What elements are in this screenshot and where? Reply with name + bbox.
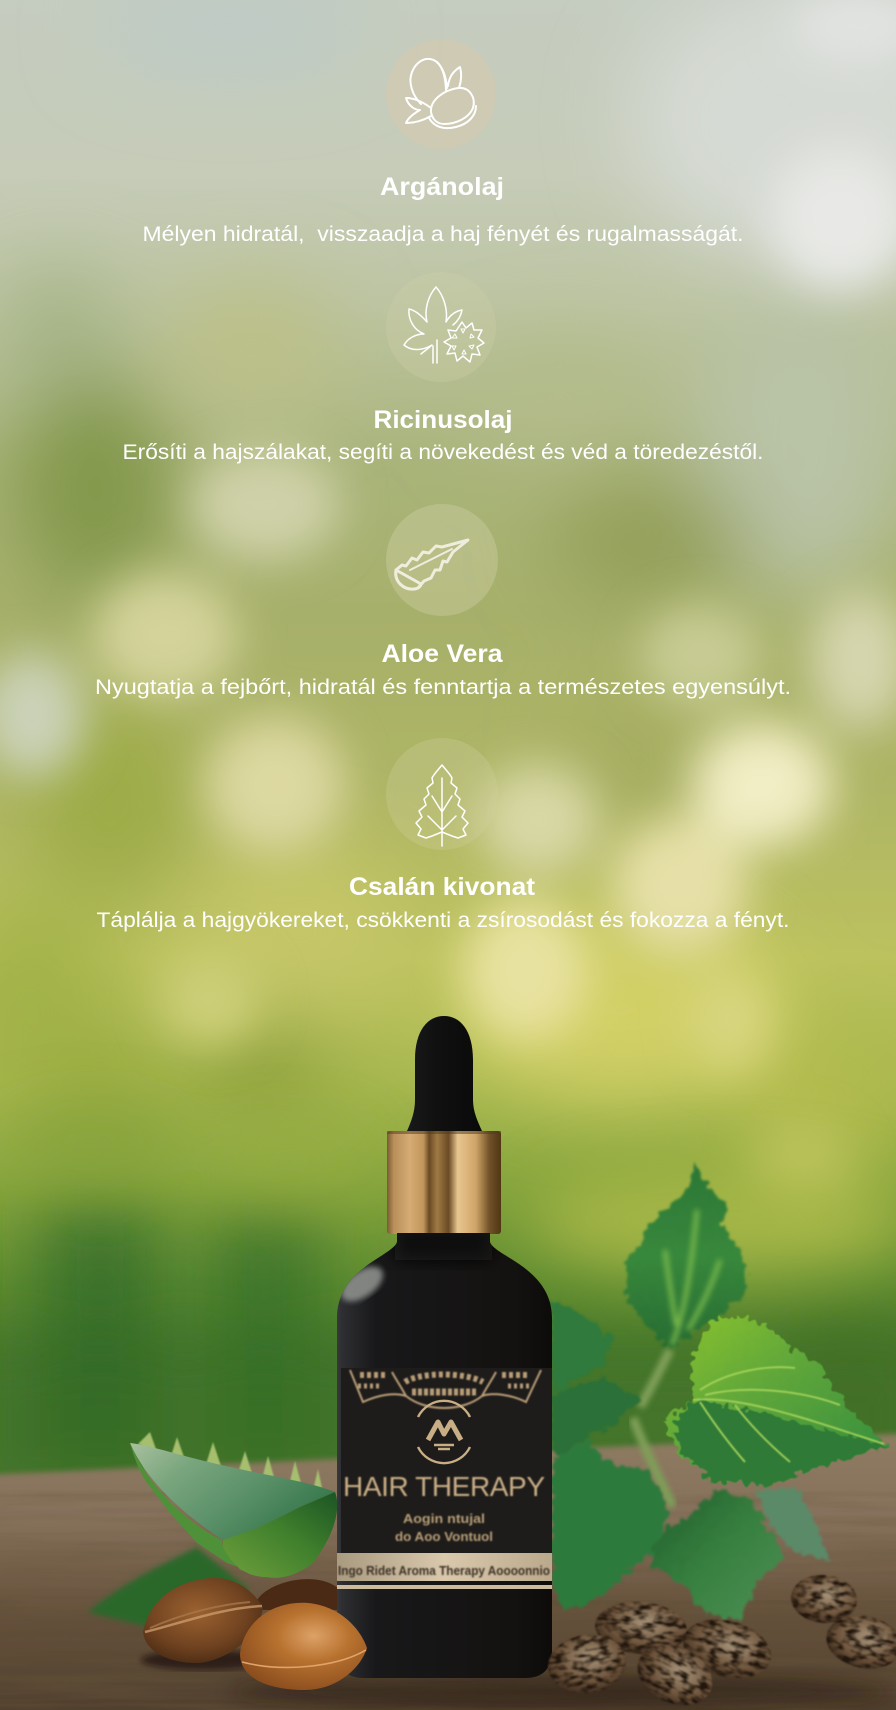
icon badge: castor leaf and seed xyxy=(386,272,496,382)
label small text: do Aoo Vontuol xyxy=(395,1529,493,1544)
aloe leaf xyxy=(88,1432,337,1627)
dropper bulb xyxy=(407,1016,482,1131)
rear leaves xyxy=(552,1300,830,1621)
rear argan nut xyxy=(257,1579,340,1610)
bottle xyxy=(330,1016,560,1680)
description: Erősíti a hajszálakat, segíti a növekedést és véd a töredezéstől. xyxy=(122,441,764,464)
title: Aloe Vera xyxy=(382,640,504,668)
feature: Aloe Vera xyxy=(95,504,791,699)
nettle plant xyxy=(552,1164,888,1621)
label cream band xyxy=(337,1553,552,1589)
castor seeds xyxy=(544,1572,896,1710)
stems xyxy=(633,1350,673,1507)
feature: Csalán kivonat xyxy=(96,738,790,932)
argan nuts xyxy=(141,1578,367,1690)
description: Mélyen hidratál, visszaadja a haj fényét és rugalmasságát. xyxy=(142,223,744,246)
label small text: Aogin ntujal xyxy=(403,1511,485,1526)
title: Argánolaj xyxy=(380,173,504,201)
label small text xyxy=(395,1511,493,1544)
description: Nyugtatja a fejbőrt, hidratál és fenntartja a természetes egyensúlyt. xyxy=(95,676,791,699)
label ornament xyxy=(350,1370,541,1408)
title: Csalán kivonat xyxy=(349,873,536,901)
icon badge: nettle leaf xyxy=(386,738,498,850)
gold collar xyxy=(387,1131,501,1234)
right leaf xyxy=(662,1318,888,1486)
top leaf xyxy=(625,1164,747,1348)
feature: Argánolaj xyxy=(142,39,744,246)
label product name: HAIR THERAPY xyxy=(343,1471,545,1502)
label logo xyxy=(418,1401,470,1463)
bottle body xyxy=(330,1226,560,1680)
icon badge: argan nut xyxy=(386,39,496,149)
description: Táplálja a hajgyökereket, csökkenti a zsírosodást és fokozza a fényt. xyxy=(96,909,790,932)
label cream band: Ingo Ridet Aroma Therapy Aoooonnio xyxy=(338,1563,550,1578)
title: Ricinusolaj xyxy=(374,406,512,434)
icon badge: aloe leaf xyxy=(386,504,498,616)
feature: Ricinusolaj xyxy=(122,272,764,464)
wooden table xyxy=(0,1433,896,1710)
